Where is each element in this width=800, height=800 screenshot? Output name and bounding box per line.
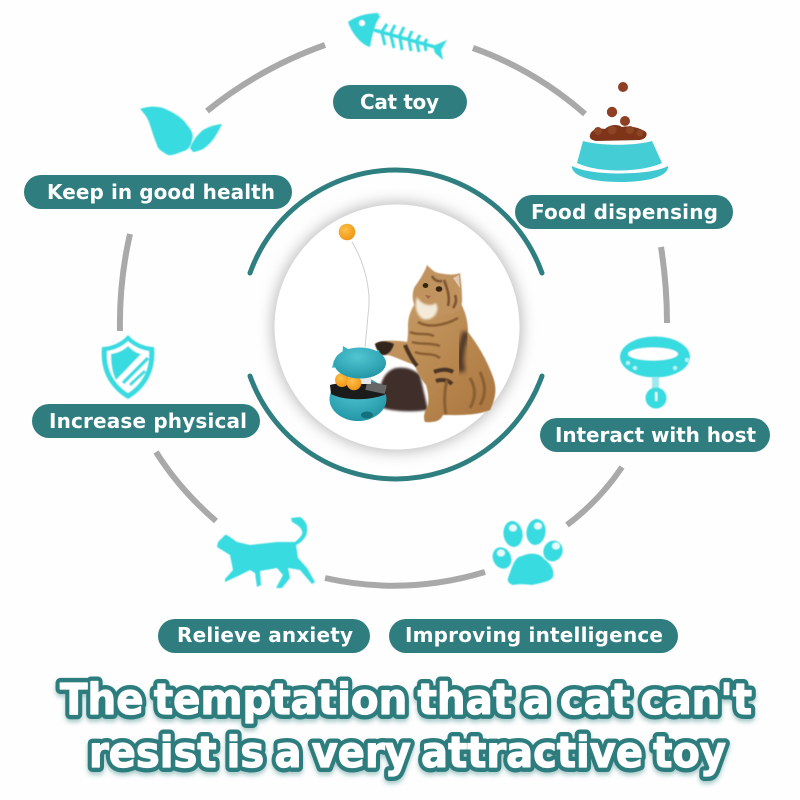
teal tumbler toy — [330, 346, 387, 421]
label: Food dispensing — [515, 195, 733, 229]
headline: resist is a very attractive toy — [89, 728, 726, 778]
icon: collar — [620, 336, 690, 408]
label: Keep in good health: Keep in good health — [47, 180, 275, 204]
headline: resist is a very attractive toy — [89, 728, 726, 778]
label: Improving intelligence: Improving intelligence — [405, 623, 663, 647]
icon: food bowl — [572, 82, 668, 182]
label: Increase physical: Increase physical — [49, 409, 247, 433]
label: Relieve anxiety: Relieve anxiety — [177, 623, 353, 647]
icon: walking cat — [217, 517, 315, 588]
icon: fish bone — [348, 13, 447, 60]
icon: shield — [102, 335, 154, 399]
label: Cat toy — [333, 85, 467, 119]
cat photo — [375, 265, 495, 422]
toy wire and ball — [339, 224, 369, 347]
label: Cat toy: Cat toy — [360, 90, 439, 114]
headline: The temptation that a cat can't — [60, 675, 752, 725]
label: Interact with host — [540, 418, 770, 452]
label: Relieve anxiety — [158, 619, 370, 653]
icon: paw — [489, 518, 566, 585]
label: Improving intelligence — [389, 619, 678, 653]
teal inner ring — [250, 170, 542, 479]
label: Interact with host: Interact with host — [555, 423, 756, 447]
label: Keep in good health — [24, 175, 292, 209]
central photo circle — [272, 202, 522, 452]
grey dashed outer ring — [120, 45, 667, 586]
label: Increase physical — [32, 404, 260, 438]
icon: leaves — [140, 107, 222, 155]
headline — [60, 675, 752, 778]
headline: The temptation that a cat can't — [60, 675, 752, 725]
label: Food dispensing: Food dispensing — [531, 200, 718, 224]
